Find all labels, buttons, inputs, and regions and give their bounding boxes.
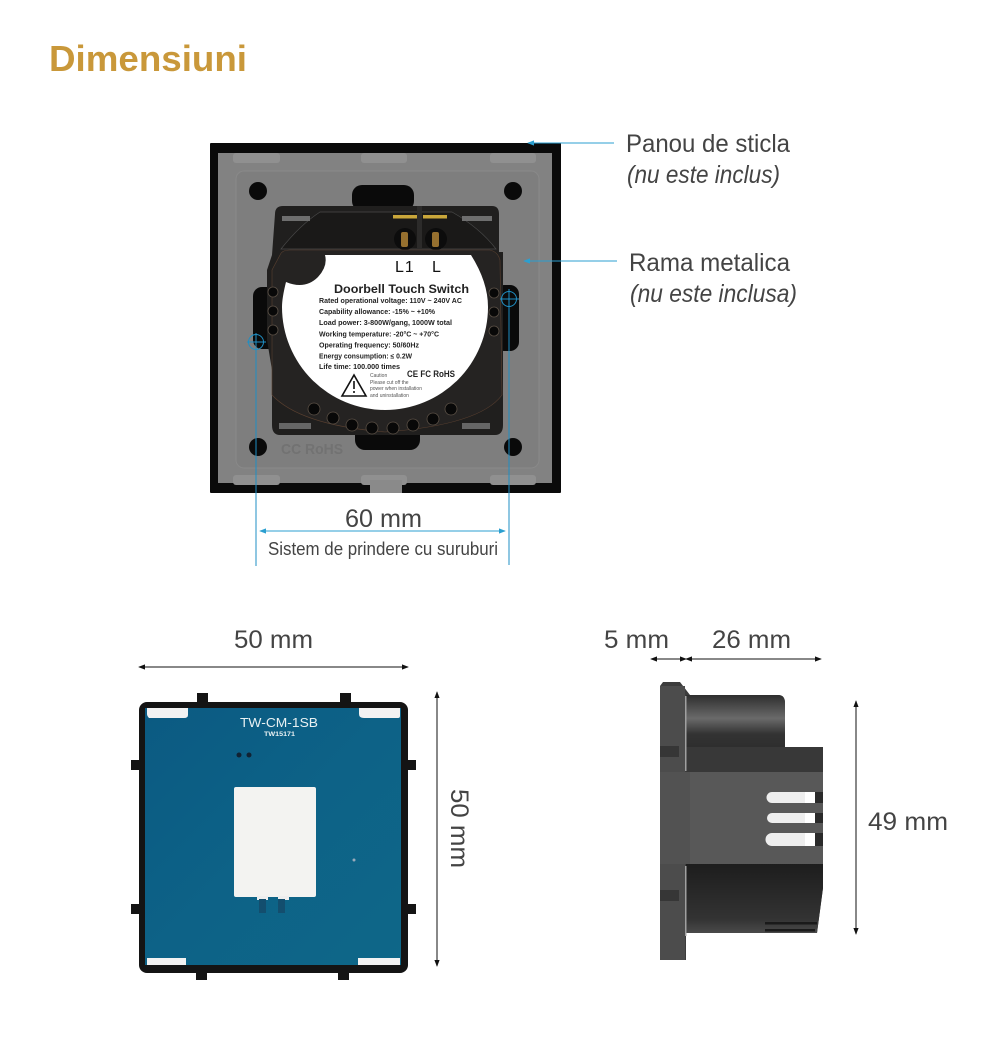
caution text: Caution [370,373,387,379]
label text: Working temperature: -20°C ~ +70°C [319,330,439,338]
label text [319,282,469,379]
caution text: power when installation [370,386,422,392]
panel: back view of switch [210,143,561,493]
dimension: 26 mm [686,626,821,659]
vent slots [766,792,815,846]
label sticker [282,255,488,410]
model text: TW-CM-1SB [240,715,318,730]
dimension: 60 mm: Sistem de prindere cu suruburi [268,539,498,559]
dimension: 5 mm: 5 mm [604,626,669,654]
white component [234,787,316,897]
metal frame: CC RoHS [281,441,343,458]
switch module [267,206,503,435]
label text: Operating frequency: 50/60Hz [319,342,420,350]
panel: front module (blue PCB): TW15171 [264,732,296,738]
panel: front module (blue PCB) [131,693,416,980]
callout: glass panel: Panou de sticla [626,130,790,158]
dimension: 60 mm [247,289,519,566]
dimension: 60 mm: 60 mm [345,505,422,533]
dimension: 50 mm width: 50 mm [234,626,313,654]
callout: glass panel [528,130,790,189]
corner clips [147,708,400,965]
label text: Load power: 3-800W/gang, 1000W total [319,320,452,327]
callout: metal frame: Rama metalica [629,249,790,277]
callout: metal frame: (nu este inclusa) [630,280,797,308]
label text: Energy consumption: ≤ 0.2W [319,354,412,360]
dimension: 26 mm: 26 mm [712,626,791,654]
caution text [370,373,422,399]
icon: warning triangle [342,375,366,396]
dimension: 50 mm height: 50 mm [445,789,473,868]
label text: Rated operational voltage: 110V ~ 240V AC [319,298,462,305]
switch module: L [432,259,441,276]
label text: Doorbell Touch Switch [334,282,469,296]
metal frame [218,153,552,493]
callout: metal frame [524,249,797,308]
dimension: 5 mm [604,626,686,659]
callout: glass panel: (nu este inclus) [627,161,780,189]
title: Dimensiuni [49,38,247,79]
caution text: Please cut off the [370,380,409,386]
dimension: 49 mm: 49 mm [868,808,948,836]
terminal labels: L1 [395,259,415,276]
glass panel outer [210,143,561,493]
panel: side module [660,682,823,960]
label text: Life time: 100.000 times [319,364,400,371]
label text: CE FC RoHS [407,369,455,379]
label text: Capability allowance: -15% ~ +10% [319,309,436,316]
caution text: and uninstallation [370,393,409,399]
